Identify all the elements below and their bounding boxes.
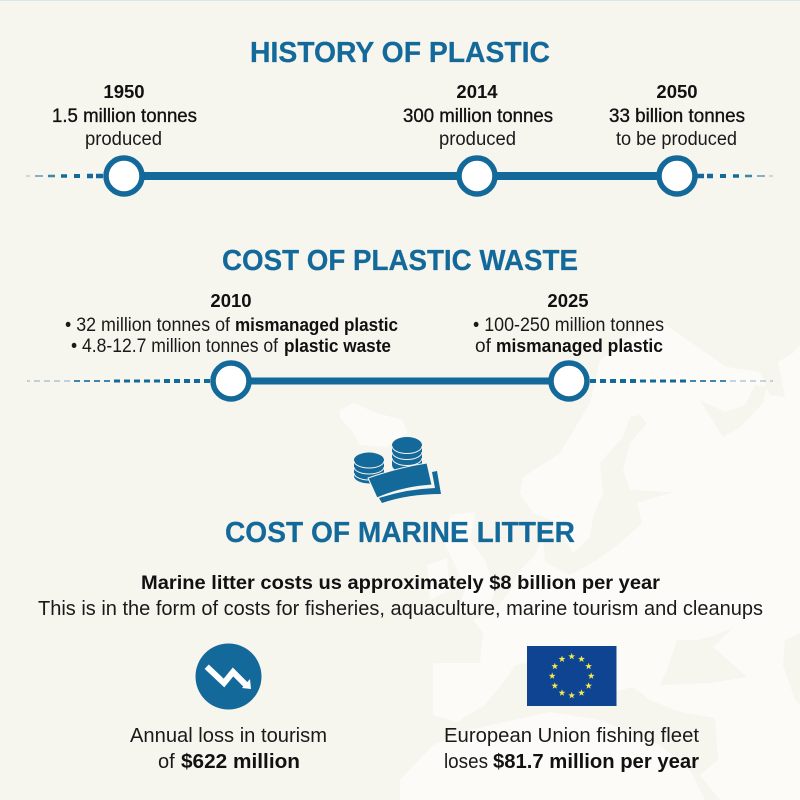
background world map [340,323,800,800]
marine litter summary: This is in the form of costs for fisheries, aquaculture, marine tourism and cleanups [38,598,763,620]
milestone 2014 [403,81,553,150]
text: EU fishing fleet loss: loses [444,751,488,773]
text: tourism loss: $622 million [181,751,300,773]
marine litter summary [38,572,763,620]
milestone 1950: produced [85,129,162,150]
milestone 2010 [65,290,398,357]
text: EU fishing fleet loss: $81.7 million per year [493,751,699,773]
milestone 2014: 300 million tonnes [403,106,553,127]
milestone 2025: 2025 [547,290,589,311]
text: tourism loss [130,725,327,773]
milestone 1950 [52,81,197,150]
timeline: cost of plastic waste [27,363,773,399]
milestone 2010: plastic waste [284,335,391,356]
milestone 2014: 2014 [456,81,498,102]
milestone 1950: 1.5 million tonnes [52,106,197,127]
milestone 2025: mismanaged plastic [496,335,663,356]
milestone 2010: 2010 [210,290,252,311]
icon: falling trend arrow [196,644,262,710]
icon: EU flag [527,646,616,706]
milestone 2025: of [475,336,492,357]
timeline: history of plastic [26,158,773,194]
milestone 2025 [473,290,664,357]
text: EU fishing fleet loss: European Union fishing fleet [444,725,699,747]
milestone 1950: 1950 [103,81,145,102]
title: cost of marine litter: COST OF MARINE LITTER [225,517,575,549]
milestone 2010: • 4.8-12.7 million tonnes of [71,336,279,357]
milestone 2050: 2050 [656,81,698,102]
title: history of plastic: HISTORY OF PLASTIC [250,37,550,69]
milestone 2050: 33 billion tonnes [609,106,745,127]
icon: coins and banknotes [354,437,441,503]
title: cost of plastic waste: COST OF PLASTIC WASTE [222,245,578,277]
text: tourism loss: of [158,751,175,773]
milestone 2050 [609,81,745,150]
milestone 2010: • 32 million tonnes of [65,315,231,336]
milestone 2025: • 100-250 million tonnes [473,315,664,336]
milestone 2050: to be produced [616,129,737,150]
text: tourism loss: Annual loss in tourism [130,725,327,747]
milestone 2010: mismanaged plastic [235,314,398,335]
milestone 2014: produced [439,129,516,150]
marine litter summary: Marine litter costs us approximately $8 billion per year [141,572,660,594]
text: EU fishing fleet loss [444,725,699,773]
